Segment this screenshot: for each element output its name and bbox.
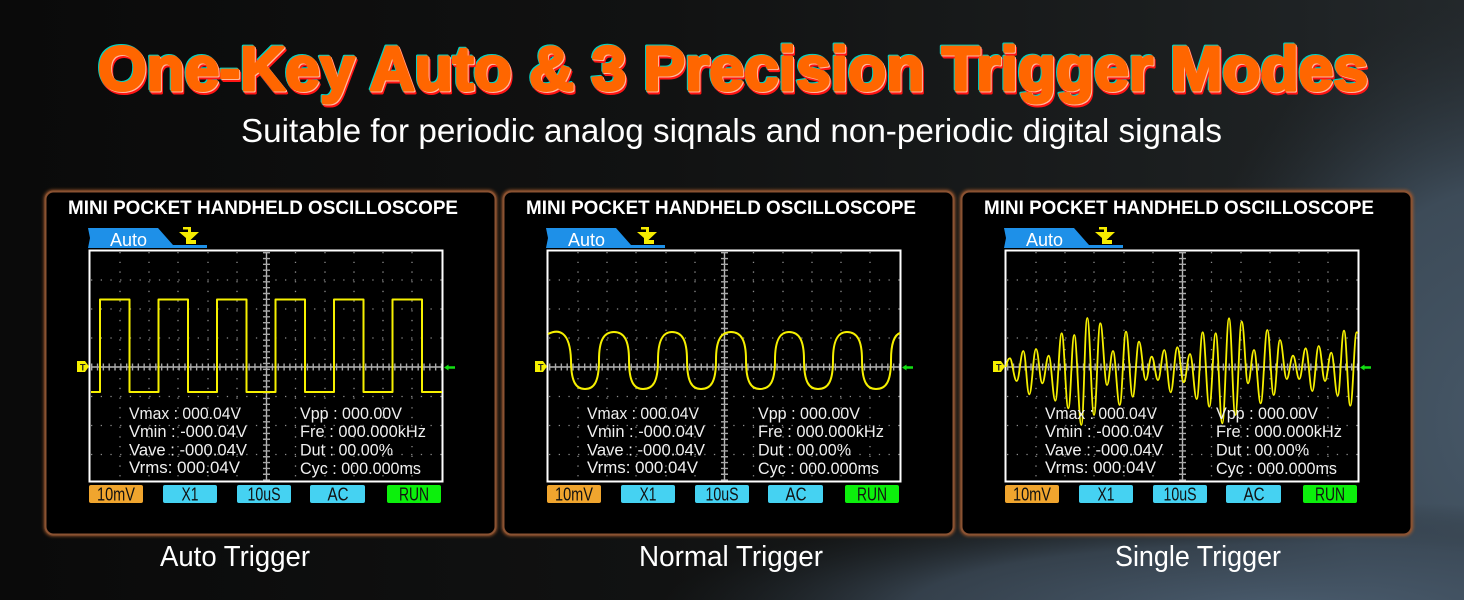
status buttons: AC [786, 484, 806, 504]
readouts right: Fre : 000.000kHz [300, 422, 426, 441]
icon: green level arrow [444, 364, 455, 370]
readouts left [129, 404, 248, 477]
oscilloscope screen grid [1006, 250, 1358, 482]
readouts left: Vave : -000.04V [587, 440, 706, 460]
trigger marker: T [80, 362, 86, 372]
readouts right: Vpp : 000.00V [300, 404, 403, 423]
caption: auto trigger: Auto Trigger [160, 541, 310, 573]
readouts left: Vmin : -000.04V [129, 422, 248, 441]
trigger marker: T [996, 362, 1002, 372]
readouts right: Cyc : 000.000ms [1216, 459, 1337, 478]
auto tab [546, 228, 665, 250]
icon: trigger edge [637, 227, 657, 244]
icon: trigger edge [1095, 227, 1115, 244]
status buttons: RUN [1315, 484, 1345, 504]
auto tab: Auto [568, 230, 605, 250]
status buttons: 10mV [555, 484, 593, 504]
readouts left: Vrms: 000.04V [1045, 458, 1157, 477]
readouts right: Vpp : 000.00V [758, 404, 861, 423]
status buttons: RUN [857, 484, 887, 504]
auto tab [88, 228, 207, 250]
oscilloscope screen grid [548, 250, 900, 482]
status buttons: AC [1244, 484, 1264, 504]
readouts left: Vmax : 000.04V [587, 404, 700, 423]
readouts right: Cyc : 000.000ms [758, 459, 879, 478]
status buttons [547, 484, 899, 504]
panel: single trigger oscilloscope [960, 190, 1413, 536]
readouts left [587, 404, 706, 477]
title: One-Key Auto & 3 Precision Trigger Modes [98, 35, 1368, 104]
readouts right: Fre : 000.000kHz [1216, 422, 1342, 441]
readouts right [1216, 404, 1342, 478]
readouts right [758, 404, 884, 478]
panel heading: MINI POCKET HANDHELD OSCILLOSCOPE [526, 197, 916, 219]
panel heading: MINI POCKET HANDHELD OSCILLOSCOPE [984, 197, 1374, 219]
status buttons: 10uS [706, 484, 738, 504]
readouts right: Cyc : 000.000ms [300, 459, 421, 478]
caption: normal trigger: Normal Trigger [639, 541, 823, 573]
status buttons: X1 [1098, 484, 1114, 504]
status buttons: 10mV [1013, 484, 1051, 504]
auto tab: Auto [110, 230, 147, 250]
readouts left: Vmax : 000.04V [1045, 404, 1158, 423]
icon: green level arrow [902, 364, 913, 370]
trigger marker [993, 361, 1005, 372]
readouts right: Vpp : 000.00V [1216, 404, 1319, 423]
status buttons: AC [328, 484, 348, 504]
caption: single trigger: Single Trigger [1115, 541, 1281, 573]
status buttons: 10uS [1164, 484, 1196, 504]
readouts left [1045, 404, 1164, 477]
status buttons [89, 484, 441, 504]
panel: normal trigger oscilloscope [502, 190, 955, 536]
readouts left: Vave : -000.04V [1045, 440, 1164, 460]
status buttons: 10mV [97, 484, 135, 504]
status buttons: X1 [182, 484, 198, 504]
readouts left: Vrms: 000.04V [587, 458, 699, 477]
readouts right: Fre : 000.000kHz [758, 422, 884, 441]
icon: trigger edge [179, 227, 199, 244]
status buttons: 10uS [248, 484, 280, 504]
panel heading: MINI POCKET HANDHELD OSCILLOSCOPE [68, 197, 458, 219]
waveform: irregular burst signal [1006, 318, 1358, 425]
readouts left: Vmax : 000.04V [129, 404, 242, 423]
readouts right: Dut : 00.00% [758, 440, 851, 460]
status buttons: RUN [399, 484, 429, 504]
subtitle: Suitable for periodic analog siqnals and non-periodic digital signals [241, 112, 1222, 149]
status buttons [1005, 484, 1357, 504]
readouts right: Dut : 00.00% [1216, 440, 1309, 460]
trigger marker [77, 361, 89, 372]
icon: green level arrow [1360, 364, 1371, 370]
readouts left: Vmin : -000.04V [587, 422, 706, 441]
readouts right: Dut : 00.00% [300, 440, 393, 460]
readouts right [300, 404, 426, 478]
readouts left: Vrms: 000.04V [129, 458, 241, 477]
trigger marker [535, 361, 547, 372]
waveform: rounded sine wave [548, 332, 900, 389]
status buttons: X1 [640, 484, 656, 504]
auto tab: Auto [1026, 230, 1063, 250]
oscilloscope screen grid [90, 250, 442, 482]
readouts left: Vmin : -000.04V [1045, 422, 1164, 441]
panel: auto trigger oscilloscope [44, 190, 497, 536]
trigger marker: T [538, 362, 544, 372]
auto tab [1004, 228, 1123, 250]
readouts left: Vave : -000.04V [129, 440, 248, 460]
waveform: square wave [91, 300, 442, 392]
